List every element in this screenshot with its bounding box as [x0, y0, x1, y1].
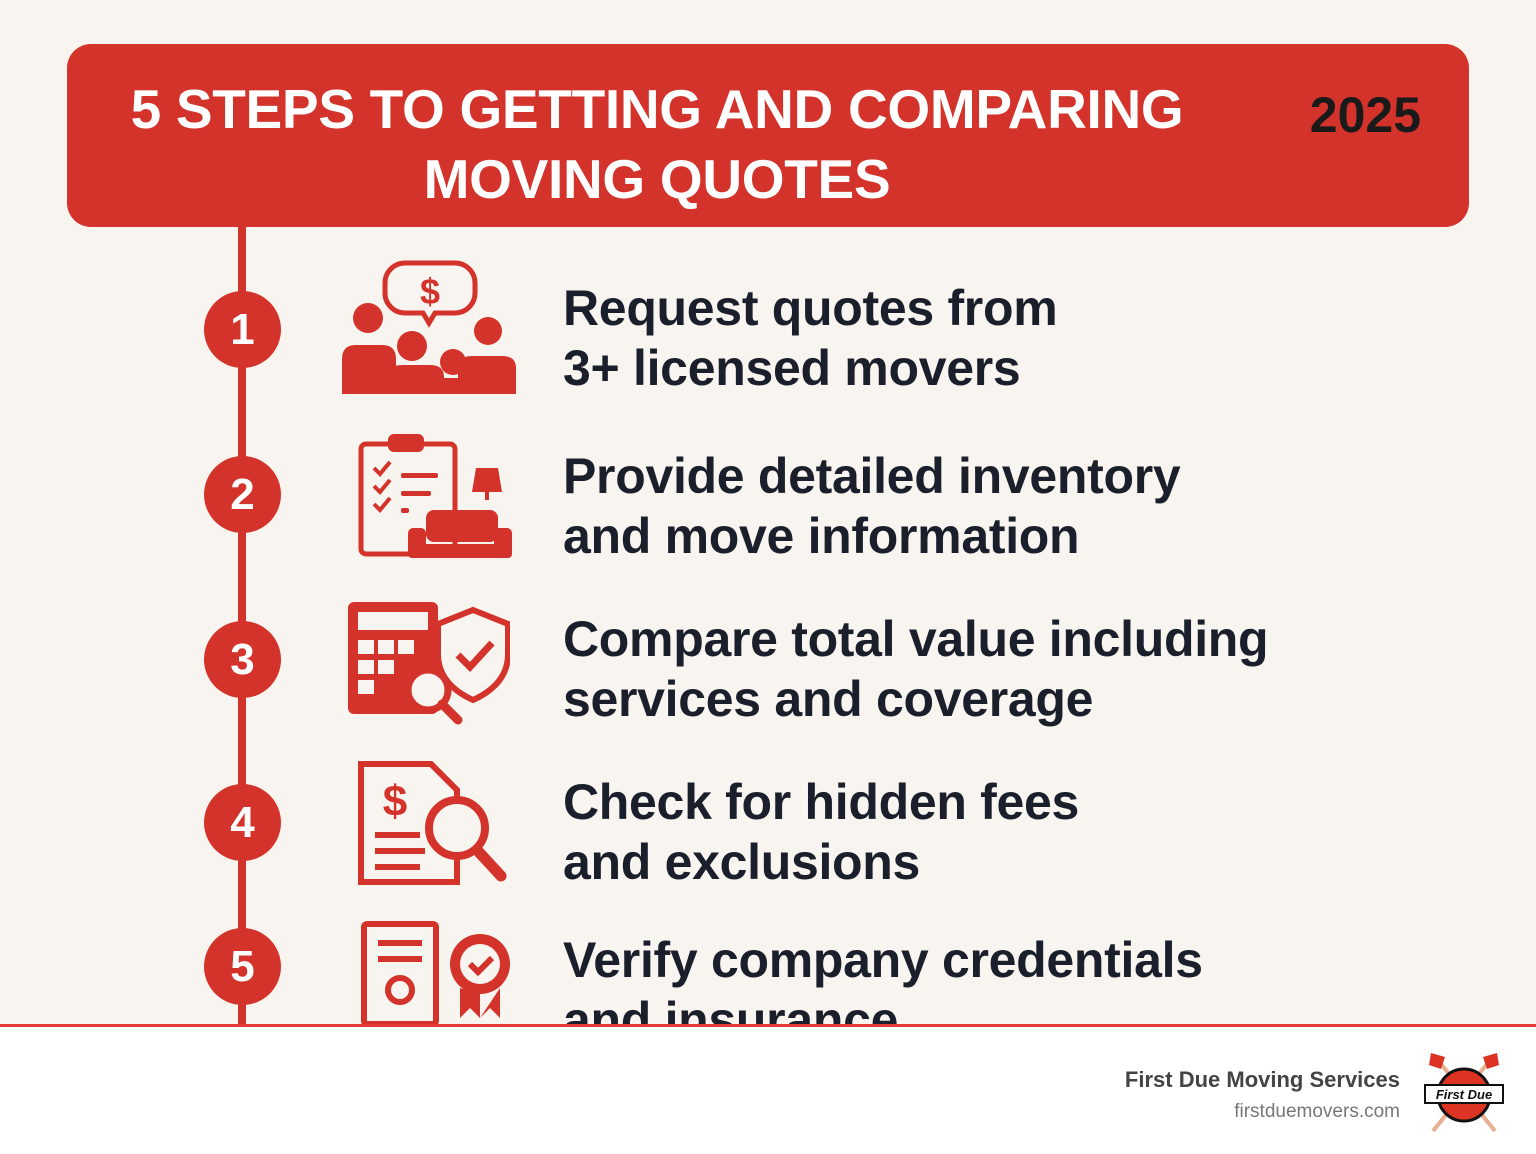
icon: fee document with magnifier: $: [383, 777, 407, 826]
title: MOVING QUOTES: [424, 148, 890, 210]
step 3 number: 3: [230, 635, 255, 684]
footer: [0, 1024, 1536, 1154]
website: firstduemovers.com: [1234, 1101, 1400, 1122]
step 5 text: [563, 932, 1203, 1024]
step 5 text: Verify company credentials: [563, 932, 1203, 988]
step 1 number: 1: [230, 305, 255, 354]
step 5 number: 5: [230, 942, 255, 991]
icon: clipboard checklist with furniture: [358, 434, 512, 558]
step 4 text: and exclusions: [563, 834, 920, 890]
step 5 number: [204, 928, 281, 1005]
icon: certificate with badge: [361, 921, 510, 1024]
icon: calculator with shield and magnifier: [348, 602, 510, 724]
step 2 text: Provide detailed inventory: [563, 448, 1180, 504]
step 1 number: [204, 291, 281, 368]
icon: people with dollar speech bubble: [342, 260, 516, 394]
step 1 text: 3+ licensed movers: [563, 340, 1020, 396]
icon: fee document with magnifier: [358, 761, 506, 885]
step 4 text: [563, 774, 1079, 890]
step 4 number: 4: [230, 798, 255, 847]
step 1 text: Request quotes from: [563, 280, 1057, 336]
header banner: [67, 44, 1469, 227]
timeline line: [238, 227, 246, 1027]
icon: people with dollar speech bubble: $: [420, 271, 440, 312]
step 3 text: services and coverage: [563, 671, 1093, 727]
step 2 text: [563, 448, 1180, 564]
title: [131, 78, 1183, 210]
step 2 number: [204, 456, 281, 533]
step 4 text: Check for hidden fees: [563, 774, 1079, 830]
logo: [1424, 1053, 1504, 1132]
step 3 text: [563, 611, 1268, 727]
title: 5 STEPS TO GETTING AND COMPARING: [131, 78, 1183, 140]
step 2 text: and move information: [563, 508, 1079, 564]
year: 2025: [1310, 87, 1421, 143]
company name: First Due Moving Services: [1125, 1067, 1400, 1092]
logo: First Due: [1436, 1087, 1492, 1102]
step 3 number: [204, 621, 281, 698]
step 3 text: Compare total value including: [563, 611, 1268, 667]
step 2 number: 2: [230, 470, 255, 519]
step 4 number: [204, 784, 281, 861]
step 1 text: [563, 280, 1057, 396]
